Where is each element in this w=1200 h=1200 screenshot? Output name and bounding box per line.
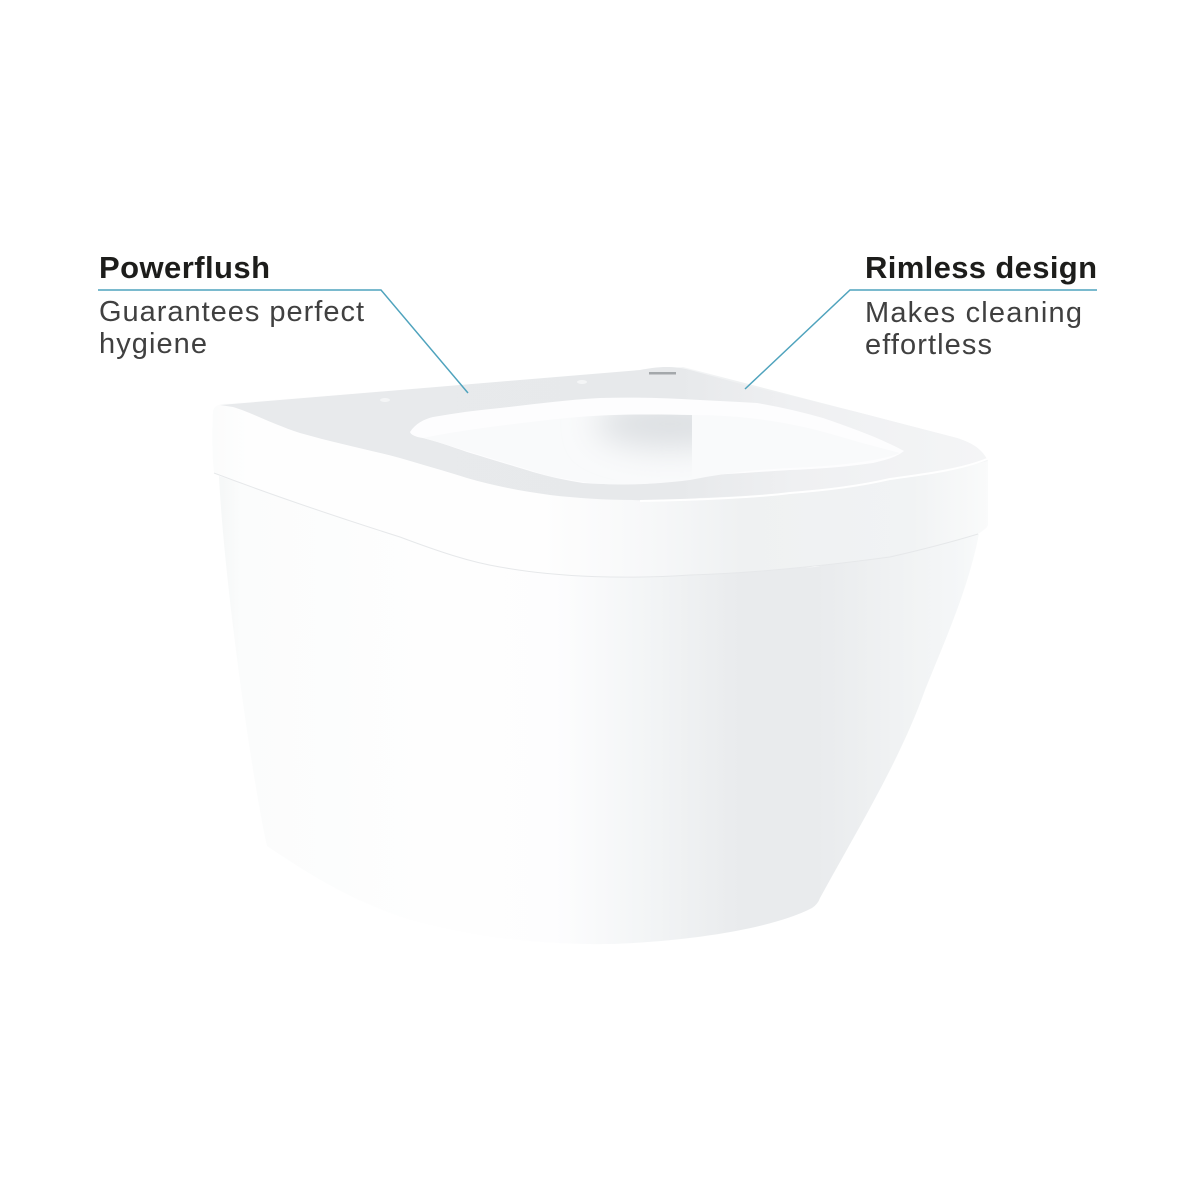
toilet rim — [212, 367, 988, 577]
description: Rimless design: effortless — [865, 329, 992, 361]
description: Rimless design: Makes cleaning — [865, 297, 1082, 329]
seat front highlight — [640, 459, 987, 501]
leader line: Rimless design — [745, 290, 1097, 389]
infographic — [98, 256, 1097, 944]
bowl inner shadow — [596, 414, 692, 457]
description: Powerflush: hygiene — [99, 328, 207, 360]
toilet body — [219, 476, 979, 944]
leader line: Powerflush — [98, 290, 468, 393]
toilet illustration — [212, 367, 988, 944]
description: Powerflush: Guarantees perfect — [99, 296, 364, 328]
logo mark and mounting holes — [380, 372, 676, 402]
seat top surface — [220, 367, 988, 500]
rim lower edge shadow — [214, 473, 978, 577]
heading: Rimless design: Rimless design — [865, 250, 1097, 285]
callout: Powerflush — [98, 250, 468, 393]
bowl opening — [410, 398, 904, 484]
callout: Rimless design — [745, 250, 1097, 389]
heading: Powerflush: Powerflush — [99, 250, 270, 285]
